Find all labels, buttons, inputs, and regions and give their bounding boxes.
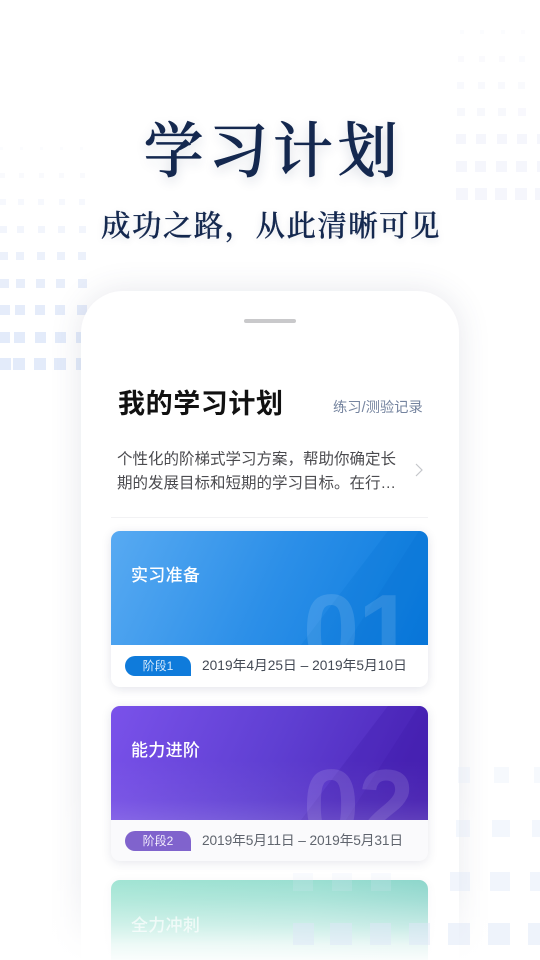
description text: 期的发展目标和短期的学习目标。在行…	[117, 474, 396, 492]
stage badge: 阶段1	[143, 659, 173, 673]
stage dates: 2019年5月11日 – 2019年5月31日	[202, 833, 403, 848]
stage dates: 2019年4月25日 – 2019年5月10日	[202, 658, 407, 673]
stage name: 全力冲刺	[131, 916, 200, 935]
panel: phone mockup	[81, 291, 459, 960]
stage name: 实习准备	[131, 566, 200, 585]
description text	[117, 450, 396, 492]
bottom white fade	[0, 760, 540, 960]
description text: 个性化的阶梯式学习方案，帮助你确定长	[117, 451, 396, 468]
icon: chevron right	[416, 464, 423, 476]
stage 1 banner	[111, 531, 428, 645]
phone speaker bar	[244, 319, 296, 323]
panel heading: 我的学习计划	[118, 389, 284, 419]
stage badge	[125, 831, 191, 851]
banner diagonal stripes	[346, 706, 428, 820]
title: 学习计划	[144, 119, 402, 185]
stage badge	[125, 656, 191, 676]
stage badge: 阶段2	[143, 834, 173, 848]
divider	[111, 517, 428, 518]
card: stage 3	[111, 880, 428, 960]
card: stage 1	[111, 531, 428, 687]
practice record link: 练习/测验记录	[333, 400, 423, 416]
banner diagonal stripes	[356, 531, 428, 630]
subtitle: 成功之路，从此清晰可见	[101, 211, 441, 243]
stage 3 banner	[111, 880, 428, 960]
stage 2 banner	[111, 706, 428, 820]
stage name: 能力进阶	[131, 741, 200, 760]
card: stage 2	[111, 706, 428, 861]
